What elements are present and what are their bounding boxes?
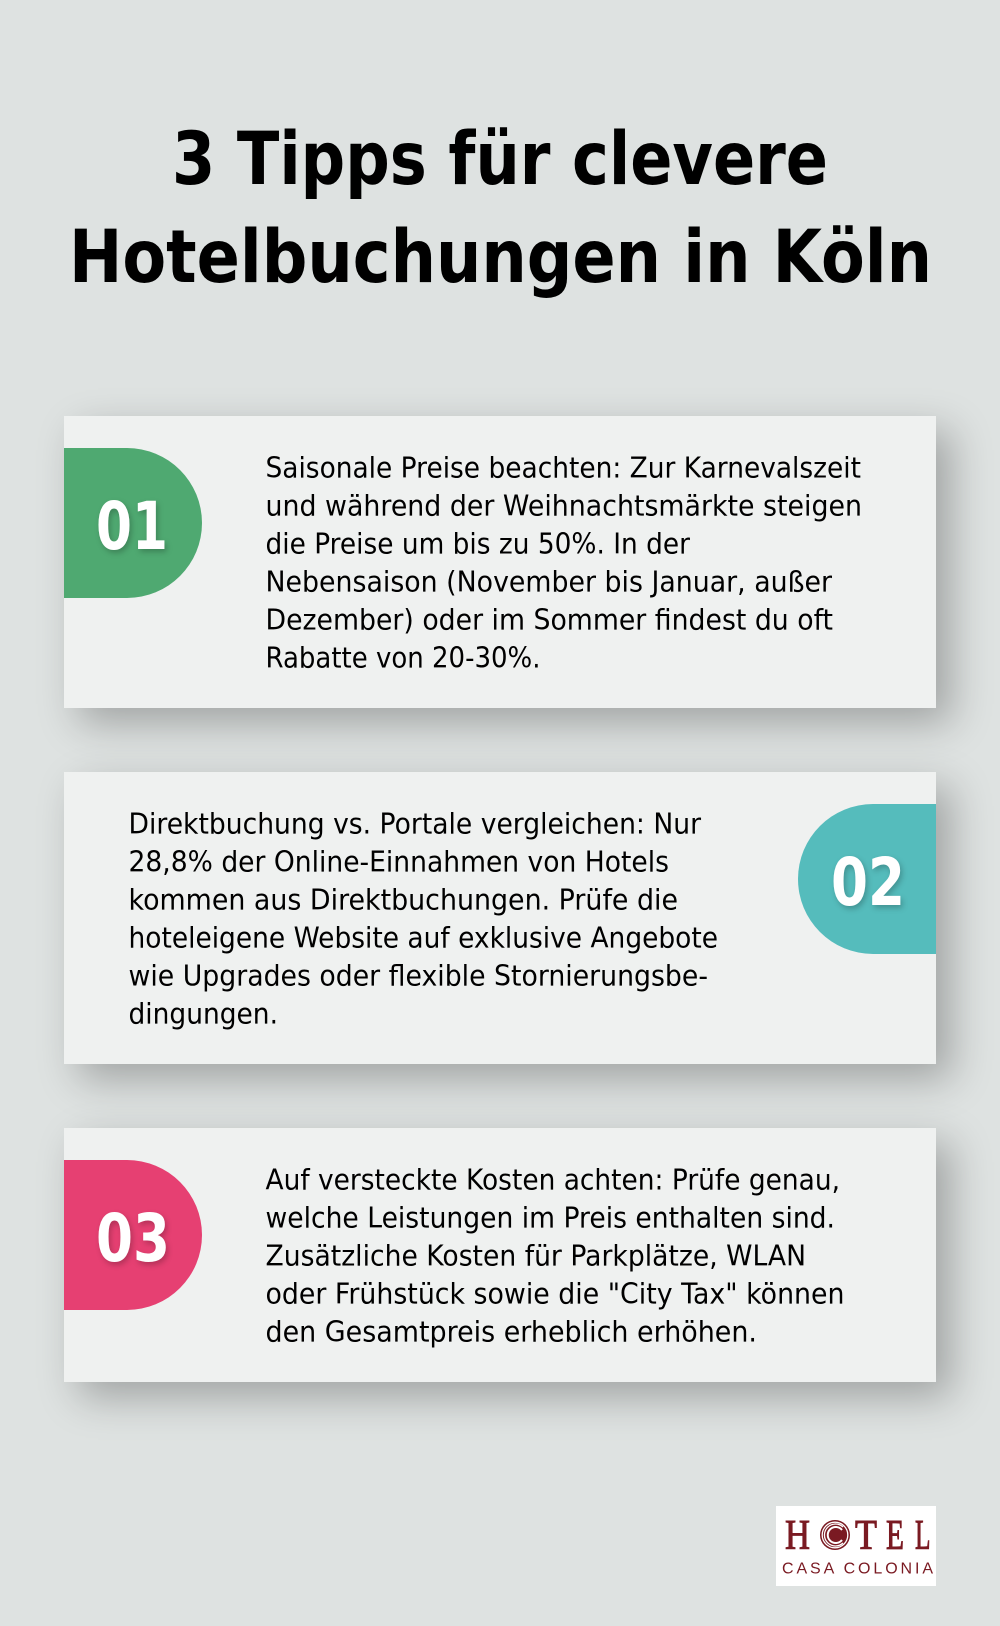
title: 3 Tipps für clevere xyxy=(172,116,828,201)
badge: 01: 01 xyxy=(96,488,168,565)
logo: Hotel Casa Colonia: E xyxy=(886,1513,904,1559)
text block: tip 01 xyxy=(266,452,862,674)
badge: 02 xyxy=(798,804,936,954)
text block: tip 01: und während der Weihnachtsmärkte steigen xyxy=(266,490,862,522)
text block: tip 02: wie Upgrades oder flexible Stornierungsbe- xyxy=(128,960,708,992)
text block: tip 02: dingungen. xyxy=(128,998,278,1030)
logo: Hotel Casa Colonia: T xyxy=(855,1513,877,1559)
panel: tip 02 direct booking xyxy=(64,772,936,1064)
text block: tip 03: oder Frühstück sowie die "City Tax" können xyxy=(266,1278,844,1310)
badge: 02: 02 xyxy=(831,844,905,921)
text block: tip 03: welche Leistungen im Preis enthalten sind. xyxy=(266,1202,835,1234)
logo: Hotel Casa Colonia xyxy=(776,1506,936,1586)
text block: tip 02: hoteleigene Website auf exklusive Angebote xyxy=(128,922,718,954)
text block: tip 02: 28,8% der Online-Einnahmen von Hotels xyxy=(128,846,669,878)
text block: tip 02 xyxy=(128,808,718,1030)
panel: tip 03 hidden costs xyxy=(64,1128,936,1382)
logo: Hotel Casa Colonia: H xyxy=(785,1513,810,1559)
badge: 03 xyxy=(64,1160,202,1310)
text block: tip 03: den Gesamtpreis erheblich erhöhen. xyxy=(266,1316,757,1348)
text block: tip 02: kommen aus Direktbuchungen. Prüfe die xyxy=(128,884,678,916)
badge: 03: 03 xyxy=(96,1200,170,1277)
text block: tip 01: Dezember) oder im Sommer findest du oft xyxy=(266,604,833,636)
text block: tip 03: Zusätzliche Kosten für Parkplätze, WLAN xyxy=(266,1240,806,1272)
text block: tip 01: Rabatte von 20-30%. xyxy=(266,642,540,674)
text block: tip 01: Nebensaison (November bis Januar, außer xyxy=(266,566,832,598)
title xyxy=(69,116,932,299)
badge: 01 xyxy=(64,448,202,598)
text block: tip 03: Auf versteckte Kosten achten: Prüfe genau, xyxy=(266,1164,840,1196)
text block: tip 01: die Preise um bis zu 50%. In der xyxy=(266,528,690,560)
logo: Hotel Casa Colonia: CASA COLONIA xyxy=(782,1560,933,1578)
text block: tip 03 xyxy=(266,1164,844,1348)
text block: tip 02: Direktbuchung vs. Portale vergleichen: Nur xyxy=(128,808,701,840)
panel: tip 01 seasonal prices xyxy=(64,416,936,708)
text block: tip 01: Saisonale Preise beachten: Zur Karnevalszeit xyxy=(266,452,861,484)
